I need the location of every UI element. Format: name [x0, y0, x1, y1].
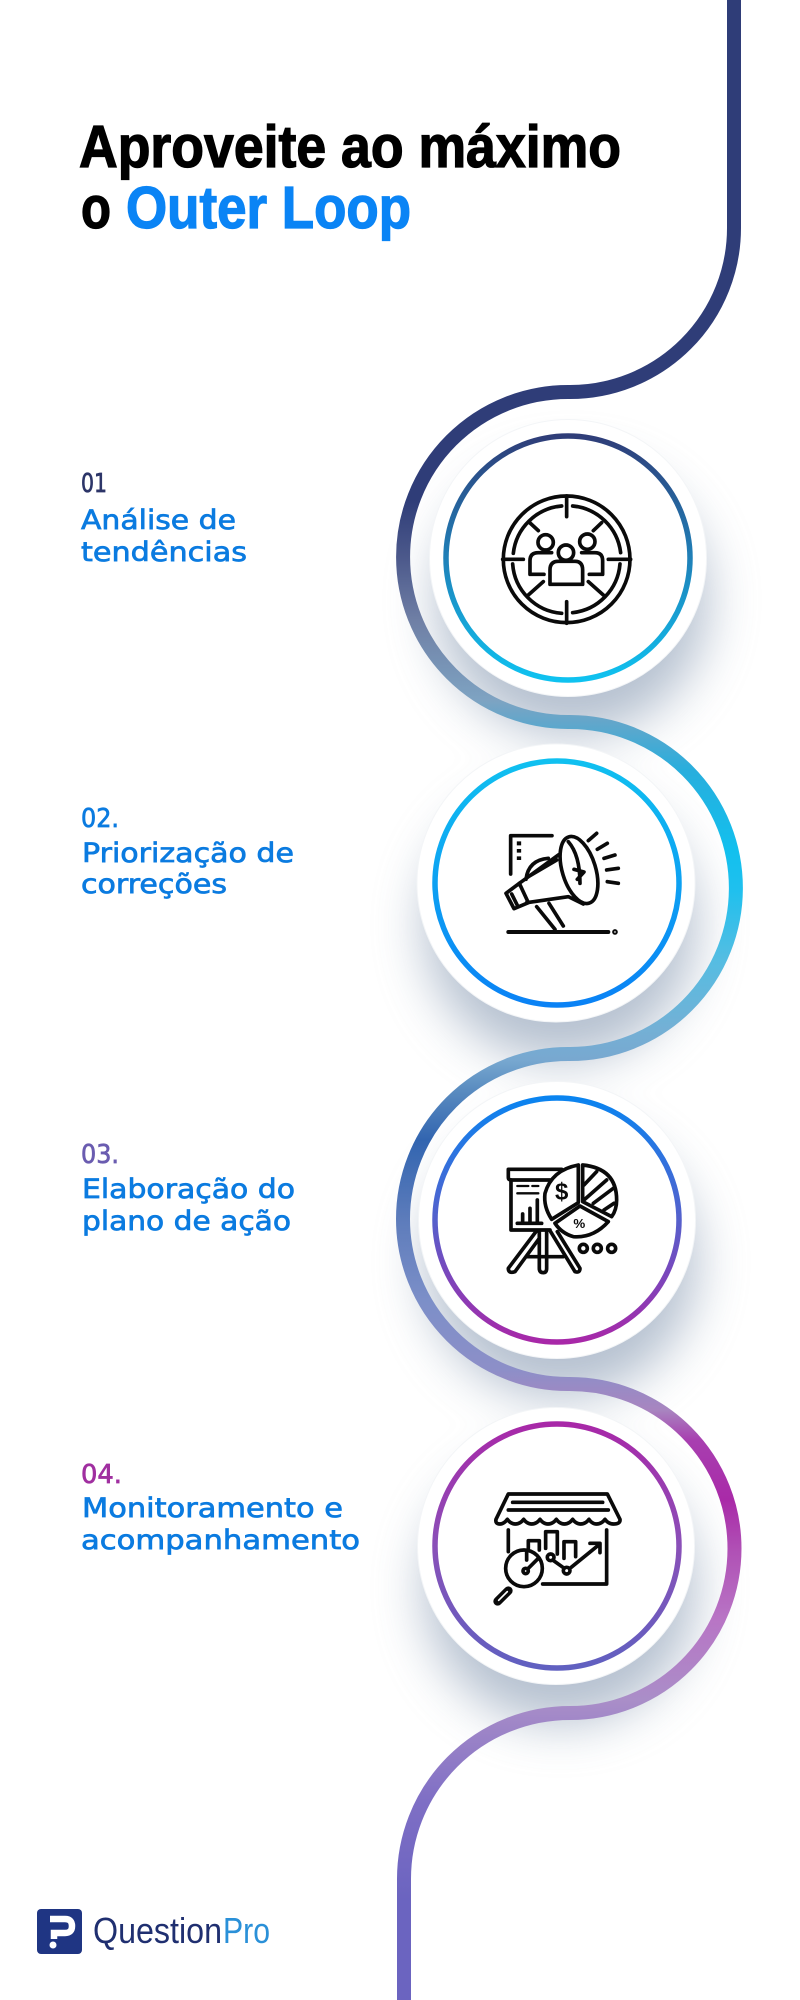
disc drop shadows	[424, 464, 708, 1724]
step 04 text	[81, 1460, 360, 1556]
icon: megaphone	[506, 832, 618, 933]
step 01 text: 01	[81, 469, 107, 499]
title	[79, 114, 621, 241]
step 01 text	[81, 469, 247, 568]
step 04 text: acompanhamento	[81, 1525, 360, 1556]
step 01 text: Análise de	[81, 505, 236, 536]
step 02 text: 02.	[81, 804, 119, 834]
disc 3 with ring	[418, 1082, 696, 1358]
step 03 text: Elaboração do	[82, 1174, 295, 1205]
logo: QuestionPro	[37, 1909, 270, 1954]
title: Outer Loop	[126, 175, 411, 241]
icon: presentation board with pie chart: $	[555, 1178, 568, 1205]
logo: QuestionPro: Question	[93, 1910, 222, 1951]
step 04 text: 04.	[81, 1460, 122, 1490]
step 01 text: tendências	[81, 537, 247, 568]
step 03 text	[81, 1140, 295, 1237]
step 04 text: Monitoramento e	[82, 1493, 343, 1524]
title: Aproveite ao máximo	[79, 114, 621, 180]
step 03 text: 03.	[81, 1140, 119, 1170]
step 02 text	[81, 804, 294, 900]
logo: QuestionPro: Pro	[223, 1910, 270, 1951]
disc 4 with ring	[418, 1408, 694, 1684]
icon: target with people	[503, 496, 631, 623]
disc 2 with ring	[417, 744, 695, 1022]
step 03 text: plano de ação	[82, 1206, 291, 1237]
disc 1 with ring	[430, 420, 706, 696]
icon: presentation board with pie chart: %	[573, 1216, 585, 1231]
icon: presentation board with pie chart	[508, 1165, 617, 1273]
step 02 text: correções	[81, 869, 227, 900]
step 02 text: Priorização de	[82, 838, 294, 869]
icon: storefront with chart and magnifier	[496, 1494, 620, 1601]
winding gradient track	[403, 0, 736, 2000]
title: o	[81, 175, 111, 241]
